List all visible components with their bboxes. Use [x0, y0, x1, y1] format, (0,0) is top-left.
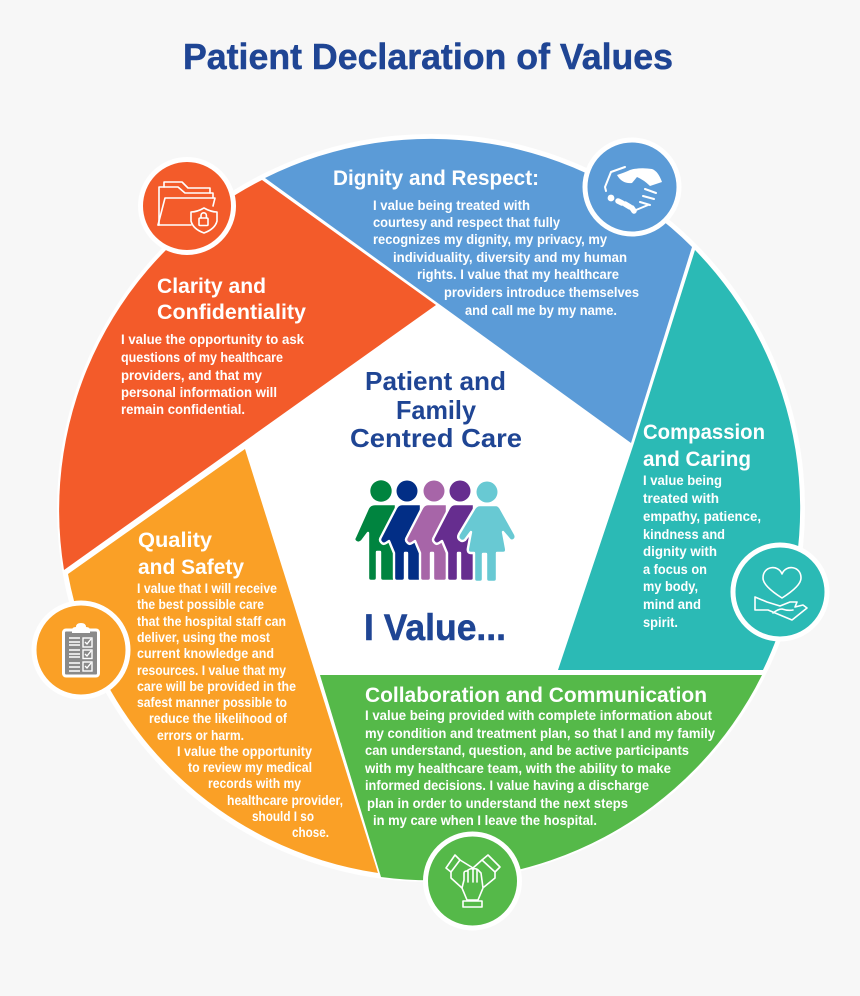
text: compassion and caring: mind and: [643, 597, 701, 612]
panel: compassion and caring: [558, 250, 800, 670]
text: dignity and respect: I value being treated with: [373, 198, 530, 213]
text: quality and safety: reduce the likelihood of: [149, 711, 287, 726]
text: quality and safety: deliver, using the most: [137, 630, 270, 645]
heading: collaboration and communication: Collaboration and Communication: [365, 683, 707, 707]
heading: compassion and caring: [643, 420, 765, 471]
text: collaboration and communication: informed decisions. I value having a discharge: [365, 778, 649, 793]
text: dignity and respect: individuality, diversity and my human: [393, 250, 627, 265]
text: quality and safety: resources. I value that my: [137, 663, 286, 678]
text: clarity and confidentiality: I value the opportunity to ask: [121, 332, 304, 347]
text: quality and safety: care will be provided in the: [137, 679, 296, 694]
icon: folder with lock: [140, 160, 234, 252]
text: quality and safety: healthcare provider,: [227, 793, 343, 808]
text: dignity and respect: rights. I value that my healthcare: [417, 267, 619, 282]
text: clarity and confidentiality: questions of my healthcare: [121, 350, 283, 365]
text: compassion and caring: empathy, patience,: [643, 509, 761, 524]
text: quality and safety: [137, 581, 343, 840]
center heading: patient and family centred care: Patient and: [365, 366, 506, 396]
icon: family of five people: [354, 480, 516, 582]
center heading: patient and family centred care: Family: [396, 395, 477, 425]
text: clarity and confidentiality: personal information will: [121, 385, 277, 400]
panel: clarity and confidentiality: [59, 180, 436, 570]
text: quality and safety: I value that I will receive: [137, 581, 277, 596]
text: collaboration and communication: plan in order to understand the next steps: [367, 796, 628, 811]
heading: dignity and respect: Dignity and Respect:: [333, 166, 539, 190]
text: collaboration and communication: can understand, question, and be active participants: [365, 743, 689, 758]
icon: hands together: [426, 834, 520, 928]
heading: clarity and confidentiality: Clarity and: [157, 274, 266, 298]
text: collaboration and communication: I value being provided with complete information about: [365, 708, 712, 723]
icon: heart in hand: [733, 545, 827, 639]
heading: quality and safety: Quality: [138, 528, 212, 552]
central white circle background: [57, 134, 805, 882]
panel: collaboration and communication: [320, 675, 762, 880]
text: dignity and respect: and call me by my name.: [465, 303, 617, 318]
heading: compassion and caring: Compassion: [643, 420, 765, 444]
text: compassion and caring: treated with: [643, 491, 719, 506]
text: collaboration and communication: [364, 708, 715, 828]
text: dignity and respect: recognizes my dignity, my privacy, my: [373, 232, 607, 247]
icon: handshake: [585, 140, 679, 234]
title: Patient Declaration of Values: [183, 36, 673, 77]
center heading: i value: I Value...: [364, 607, 506, 648]
text: quality and safety: should I so: [252, 809, 314, 824]
text: clarity and confidentiality: remain confidential.: [121, 402, 245, 417]
center heading: patient and family centred care: Centred Care: [350, 423, 522, 453]
text: compassion and caring: [643, 473, 761, 630]
icon: clipboard checklist: [34, 603, 128, 697]
text: quality and safety: errors or harm.: [157, 728, 244, 743]
text: collaboration and communication: with my healthcare team, with the ability to make: [364, 761, 671, 776]
text: compassion and caring: spirit.: [643, 615, 678, 630]
center heading: patient and family centred care: [350, 366, 522, 453]
heading: quality and safety: [138, 528, 244, 579]
text: compassion and caring: my body,: [643, 579, 698, 594]
heading: compassion and caring: and Caring: [643, 447, 751, 471]
text: quality and safety: I value the opportunity: [177, 744, 312, 759]
text: quality and safety: that the hospital staff can: [137, 614, 286, 629]
text: quality and safety: chose.: [292, 825, 329, 840]
text: dignity and respect: providers introduce themselves: [444, 285, 639, 300]
text: dignity and respect: [373, 198, 639, 318]
heading: quality and safety: and Safety: [138, 555, 244, 579]
text: collaboration and communication: in my care when I leave the hospital.: [373, 813, 597, 828]
heading: clarity and confidentiality: Confidentiality: [157, 300, 306, 324]
text: clarity and confidentiality: providers, and that my: [121, 368, 262, 383]
text: quality and safety: safest manner possible to: [137, 695, 287, 710]
panel: quality and safety: [68, 449, 378, 873]
text: quality and safety: to review my medical: [188, 760, 312, 775]
panel: dignity and respect: [265, 139, 692, 443]
text: quality and safety: the best possible care: [137, 597, 264, 612]
text: compassion and caring: kindness and: [643, 527, 725, 542]
text: collaboration and communication: my condition and treatment plan, so that I and my family: [365, 726, 715, 741]
text: compassion and caring: I value being: [643, 473, 722, 488]
text: dignity and respect: courtesy and respect that fully: [373, 215, 560, 230]
heading: clarity and confidentiality: [157, 274, 306, 324]
text: quality and safety: current knowledge and: [137, 646, 274, 661]
text: compassion and caring: a focus on: [643, 562, 707, 577]
text: clarity and confidentiality: [121, 332, 304, 417]
text: compassion and caring: dignity with: [643, 544, 717, 559]
text: quality and safety: records with my: [208, 776, 301, 791]
